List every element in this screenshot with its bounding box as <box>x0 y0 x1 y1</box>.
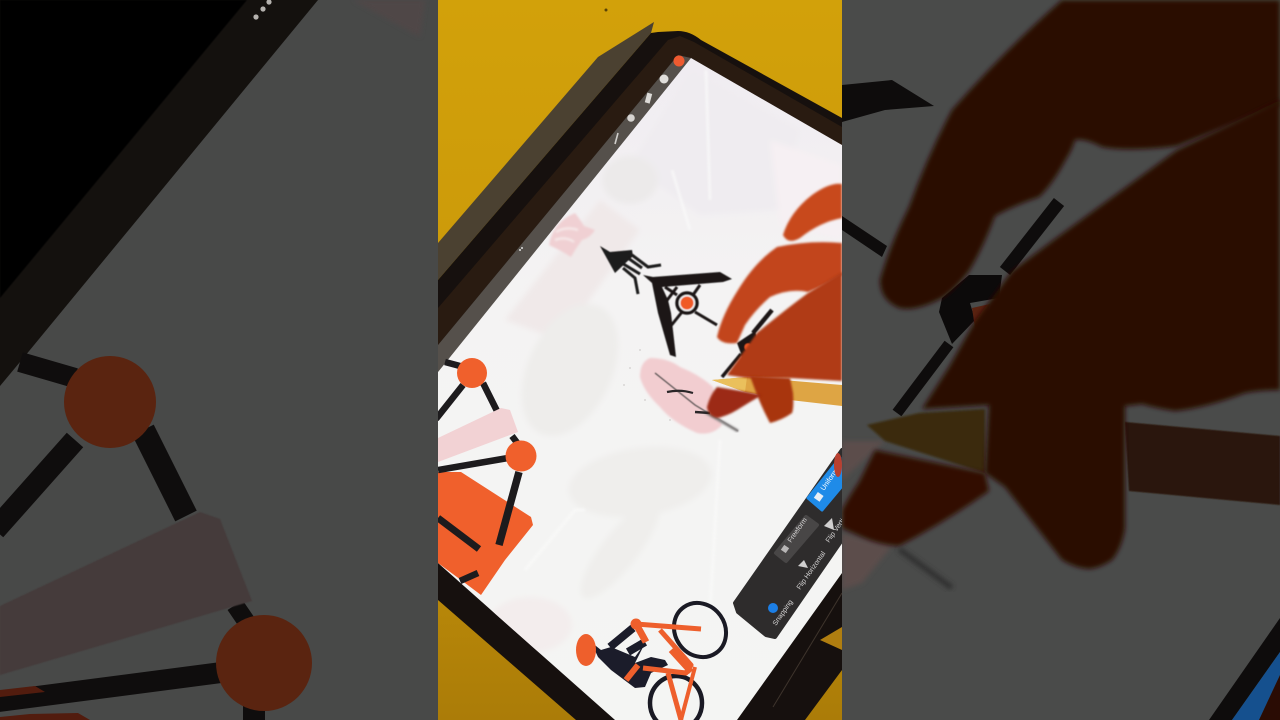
pink band <box>0 512 252 675</box>
black brush stroke <box>842 80 934 257</box>
tablet case dark band <box>0 0 318 386</box>
index finger <box>880 0 1280 309</box>
orange block <box>438 472 533 595</box>
lower finger <box>750 376 793 423</box>
palm mass <box>922 100 1280 569</box>
middle finger <box>717 242 842 343</box>
tablet case <box>438 22 842 720</box>
thumb <box>842 450 989 546</box>
pencil shaft <box>1125 422 1280 505</box>
toolbar labels <box>772 470 842 626</box>
pencil <box>712 377 842 406</box>
drawing: wheel struts <box>0 362 254 720</box>
cyclist <box>576 600 728 720</box>
case dots <box>253 0 272 20</box>
thumb <box>707 387 762 418</box>
hand dark silhouette <box>842 0 1280 569</box>
toolbar labels: Freeform <box>787 517 809 544</box>
dark tower strokes <box>897 202 1059 413</box>
toolbar labels: Flip Horizontal <box>796 550 828 591</box>
bike wheels <box>672 600 728 660</box>
pink blob with pencil marks <box>623 349 738 434</box>
screen background shapes <box>491 74 706 654</box>
small black tower <box>600 246 661 294</box>
toolbar labels: Uniform <box>820 468 840 492</box>
panel: left blurred zoom <box>0 0 438 720</box>
black tower right <box>722 310 772 377</box>
yellow desk background <box>438 0 842 720</box>
bike frame <box>626 622 701 720</box>
rider body <box>596 646 668 688</box>
pink sketch shape top <box>549 213 595 257</box>
pencil scribble blur <box>899 549 952 588</box>
toolbar labels: Flip Vertical <box>825 510 852 544</box>
toolbar labels: Snapping <box>772 599 795 627</box>
hand with pencil <box>707 184 842 423</box>
orange circles <box>64 356 312 711</box>
large black A-frame with orange hub <box>643 272 732 357</box>
bottom right tablet corner <box>1209 618 1280 720</box>
ring finger mass <box>727 272 842 381</box>
procreate toolbar top <box>519 56 684 251</box>
index finger top <box>783 184 842 241</box>
tablet screen <box>438 58 842 720</box>
helmet <box>576 634 596 666</box>
faint pink corner <box>353 0 425 37</box>
orange remnants bottom-left <box>0 686 90 720</box>
pink band on wheel <box>438 408 518 462</box>
pencil tip <box>867 409 985 473</box>
pink area lower-left <box>842 441 892 590</box>
panel: right blurred zoom <box>842 0 1280 720</box>
ferris wheel <box>436 358 536 595</box>
panel: center tablet video <box>436 0 852 720</box>
snapping toolbar <box>735 450 852 637</box>
